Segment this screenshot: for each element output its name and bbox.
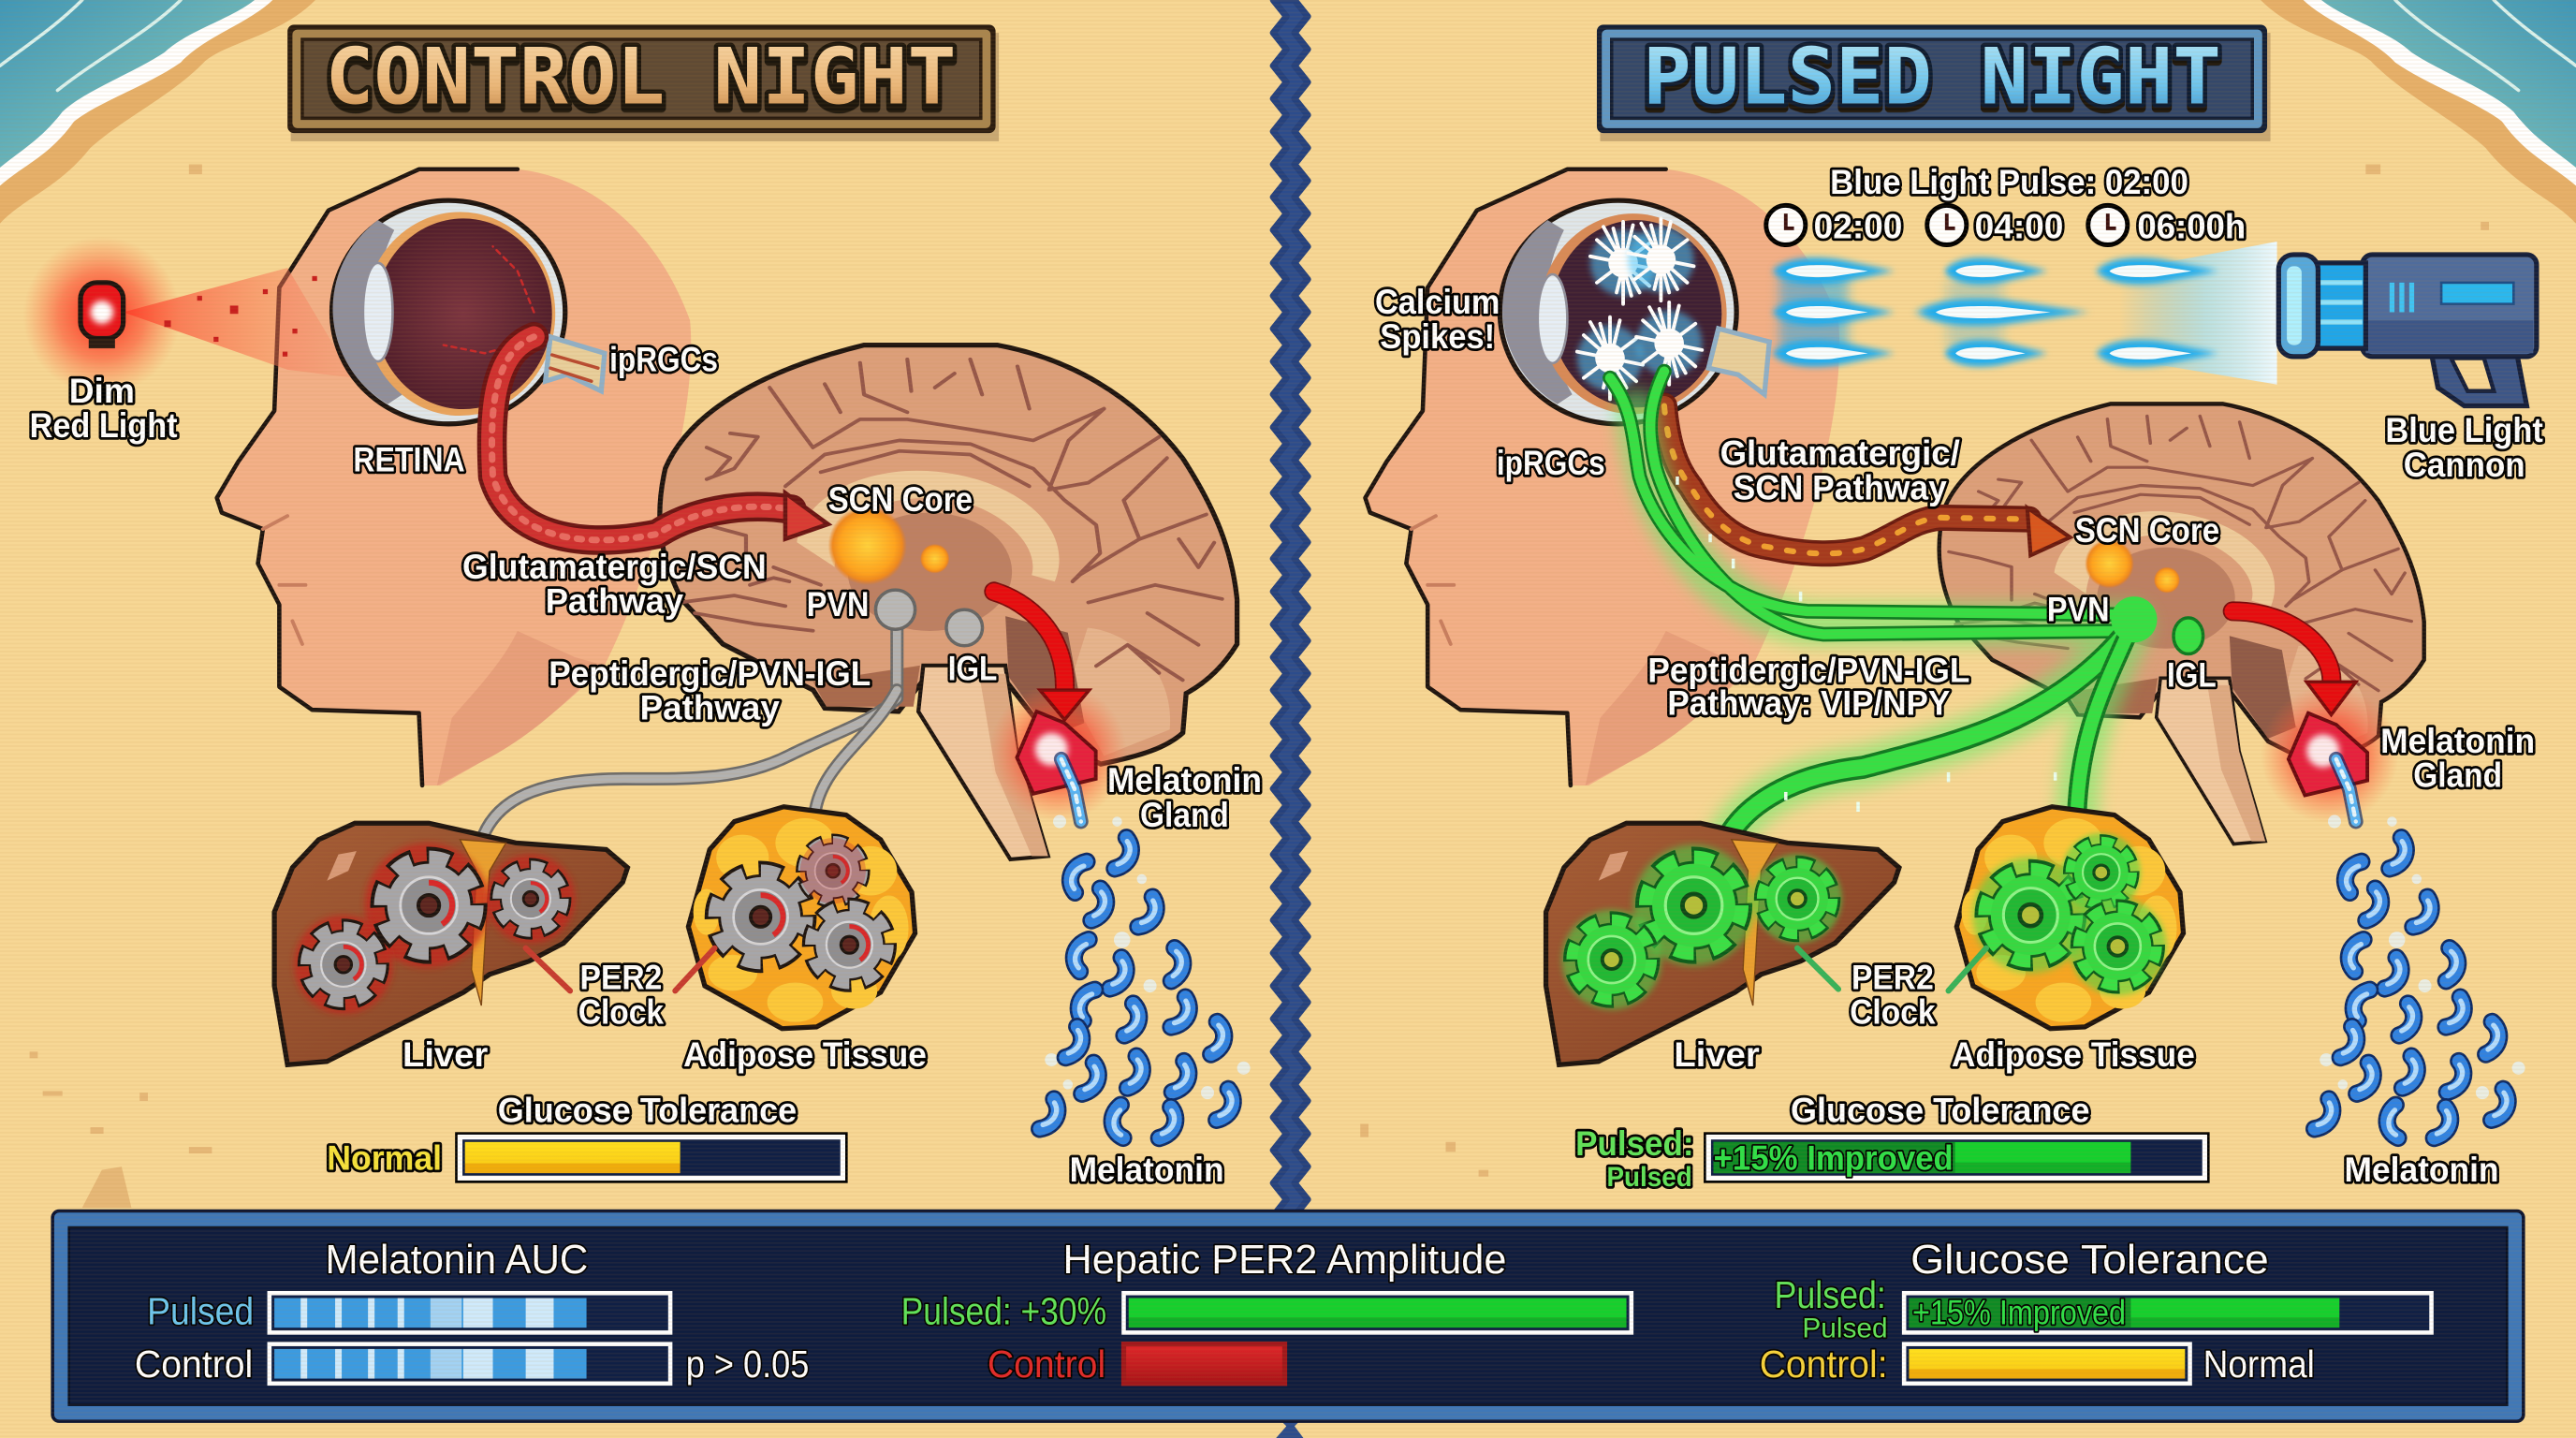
IGL node [946, 609, 983, 646]
labels: pulsed: IGL [2167, 656, 2217, 695]
labels: pulsed: ipRGCs [1497, 444, 1605, 482]
labels: control: Melatonin [1107, 761, 1262, 800]
title text: CONTROL NIGHT [326, 33, 956, 123]
metric: hepatic PER2 amplitude [901, 1237, 1632, 1386]
labels: pulsed: Pathway: VIP/NPY [1667, 683, 1950, 722]
melatonin release arrow [2232, 611, 2356, 714]
labels: control [30, 341, 1262, 1189]
liver gears [294, 843, 575, 1014]
adipose gears [1973, 833, 2167, 995]
labels: control: Pathway [640, 689, 780, 727]
adipose tissue [1956, 807, 2184, 1029]
liver [1546, 823, 1899, 1064]
dim red light [23, 237, 353, 394]
liver gears [1561, 844, 1842, 1009]
metric: hepatic PER2 amplitude: Pulsed: +30% [901, 1290, 1106, 1333]
melatonin molecules [1040, 759, 1251, 1141]
labels: pulsed: Gland [2413, 756, 2502, 795]
melatonin gland [2261, 685, 2398, 823]
PVN node [875, 590, 915, 629]
title: pulsed night [1597, 24, 2271, 141]
metric: melatonin AUC: Pulsed [147, 1290, 254, 1333]
labels: control: Adipose Tissue [683, 1035, 927, 1074]
light cone [124, 268, 353, 378]
labels: pulsed: 04:00 [1975, 207, 2063, 245]
blue haze behind pulses [1779, 270, 2002, 355]
beach corner: top right [2261, 0, 2576, 224]
light pulses [1773, 257, 2217, 367]
centre divider [1273, 0, 1308, 1438]
labels: control: Melatonin [1070, 1151, 1224, 1189]
labels: pulsed: SCN Core [2075, 511, 2219, 550]
IGL node [2174, 618, 2203, 654]
metric: glucose tolerance: Glucose Tolerance [1910, 1237, 2269, 1283]
labels: pulsed: 02:00 [1814, 207, 1902, 245]
green pathways glow [1636, 411, 2130, 846]
brain [1939, 404, 2424, 844]
glucose tolerance: pulsed: Pulsed [1606, 1162, 1692, 1193]
sand specks [30, 165, 2489, 1208]
head silhouette [217, 169, 691, 785]
metric: glucose tolerance: Pulsed [1802, 1313, 1888, 1344]
melatonin molecules [2315, 759, 2525, 1141]
labels: control: Red Light [30, 406, 178, 445]
metric: melatonin AUC: p > 0.05 [686, 1343, 809, 1386]
green pathways [1610, 372, 2130, 846]
glucose tolerance: pulsed [1575, 1092, 2210, 1193]
labels: control: PER2 [580, 959, 662, 997]
peptidergic pathways [479, 621, 897, 846]
melatonin gland [989, 683, 1127, 822]
labels: control: Liver [402, 1035, 488, 1074]
metric: hepatic PER2 amplitude: Control [988, 1343, 1105, 1386]
metric: glucose tolerance [1760, 1237, 2432, 1386]
labels: pulsed: Blue Light Pulse: 02:00 [1830, 163, 2188, 201]
glucose tolerance: pulsed: +15% Improved [1714, 1139, 1954, 1178]
metric: hepatic PER2 amplitude: Hepatic PER2 Amplitude [1063, 1237, 1506, 1283]
panel: pulsed night [1365, 163, 2543, 1193]
blue light cannon [2278, 255, 2537, 406]
title text: PULSED NIGHT [1643, 33, 2221, 123]
labels: control: RETINA [353, 441, 465, 479]
labels: pulsed [1375, 163, 2543, 1189]
melatonin bar fills [274, 1299, 587, 1379]
head silhouette [1365, 169, 1839, 785]
brain [660, 345, 1237, 859]
labels: control: ipRGCs [609, 341, 718, 379]
glucose tolerance: pulsed: Pulsed: [1575, 1124, 1694, 1163]
glucose tolerance: control [327, 1092, 848, 1183]
metric: glucose tolerance: Control: [1760, 1343, 1888, 1386]
labels: pulsed: SCN Pathway [1734, 469, 1947, 507]
blue light beam [2119, 242, 2277, 385]
labels: control: Gland [1140, 796, 1229, 834]
labels: control: PVN [807, 585, 869, 624]
melatonin release arrow [994, 592, 1090, 720]
labels: pulsed: Adipose Tissue [1952, 1035, 2195, 1074]
labels: pulsed: 06:00h [2137, 207, 2246, 245]
labels: pulsed: Cannon [2404, 446, 2525, 484]
labels: pulsed: Melatonin [2345, 1151, 2499, 1189]
labels: pulsed: Clock [1850, 992, 1936, 1031]
small nucleus glow [920, 544, 949, 574]
PER2 callout lines [1797, 948, 1986, 990]
labels: pulsed: PER2 [1852, 959, 1934, 997]
metric: melatonin AUC: Control [135, 1343, 253, 1386]
glutamatergic pathway arrow [492, 337, 828, 540]
labels: pulsed: Blue Light [2385, 411, 2543, 449]
PVN node [2111, 596, 2157, 642]
glutamatergic pathway arrow [1664, 406, 2070, 555]
metric: melatonin AUC [135, 1237, 809, 1386]
clock icons [1766, 205, 2128, 245]
glucose tolerance: control: Glucose Tolerance [498, 1092, 797, 1130]
labels: pulsed: PVN [2047, 590, 2110, 628]
metric: glucose tolerance: Normal [2203, 1343, 2315, 1386]
small nucleus glow [2154, 567, 2180, 594]
labels: control: Peptidergic/PVN-IGL [549, 654, 871, 693]
labels: pulsed: Peptidergic/PVN-IGL [1647, 651, 1969, 689]
eye [332, 200, 605, 424]
labels: pulsed: Melatonin [2380, 722, 2535, 760]
labels: control: SCN Core [828, 480, 973, 519]
labels: control: Dim [69, 372, 135, 410]
eye with calcium spikes [1500, 200, 1769, 424]
labels: pulsed: Glutamatergic/ [1720, 434, 1960, 473]
labels: control: IGL [948, 650, 997, 688]
adipose gears [715, 838, 887, 983]
PER2 callout lines [526, 948, 714, 990]
panel: summary [51, 1210, 2525, 1423]
metric: glucose tolerance: +15% Improved [1912, 1294, 2126, 1332]
metric: melatonin AUC: Melatonin AUC [326, 1237, 588, 1283]
sparkles [1676, 477, 2056, 812]
labels: control: Glutamatergic/SCN [462, 548, 767, 586]
SCN core glow [828, 506, 907, 585]
glucose tolerance: pulsed: Glucose Tolerance [1791, 1092, 2089, 1130]
panel: control night [23, 169, 1262, 1189]
labels: control: Pathway [546, 582, 684, 621]
labels: pulsed: Spikes! [1380, 317, 1495, 356]
SCN core glow [2085, 539, 2134, 588]
title: control night [287, 24, 999, 141]
metric: glucose tolerance: Pulsed: [1775, 1273, 1886, 1316]
beach corner: top left [0, 0, 315, 224]
labels: pulsed: Liver [1674, 1035, 1760, 1074]
adipose tissue [688, 807, 915, 1029]
liver [274, 823, 627, 1064]
labels: control: Clock [578, 992, 665, 1031]
glucose tolerance: control: Normal [327, 1139, 442, 1178]
labels: pulsed: Calcium [1375, 283, 1500, 321]
